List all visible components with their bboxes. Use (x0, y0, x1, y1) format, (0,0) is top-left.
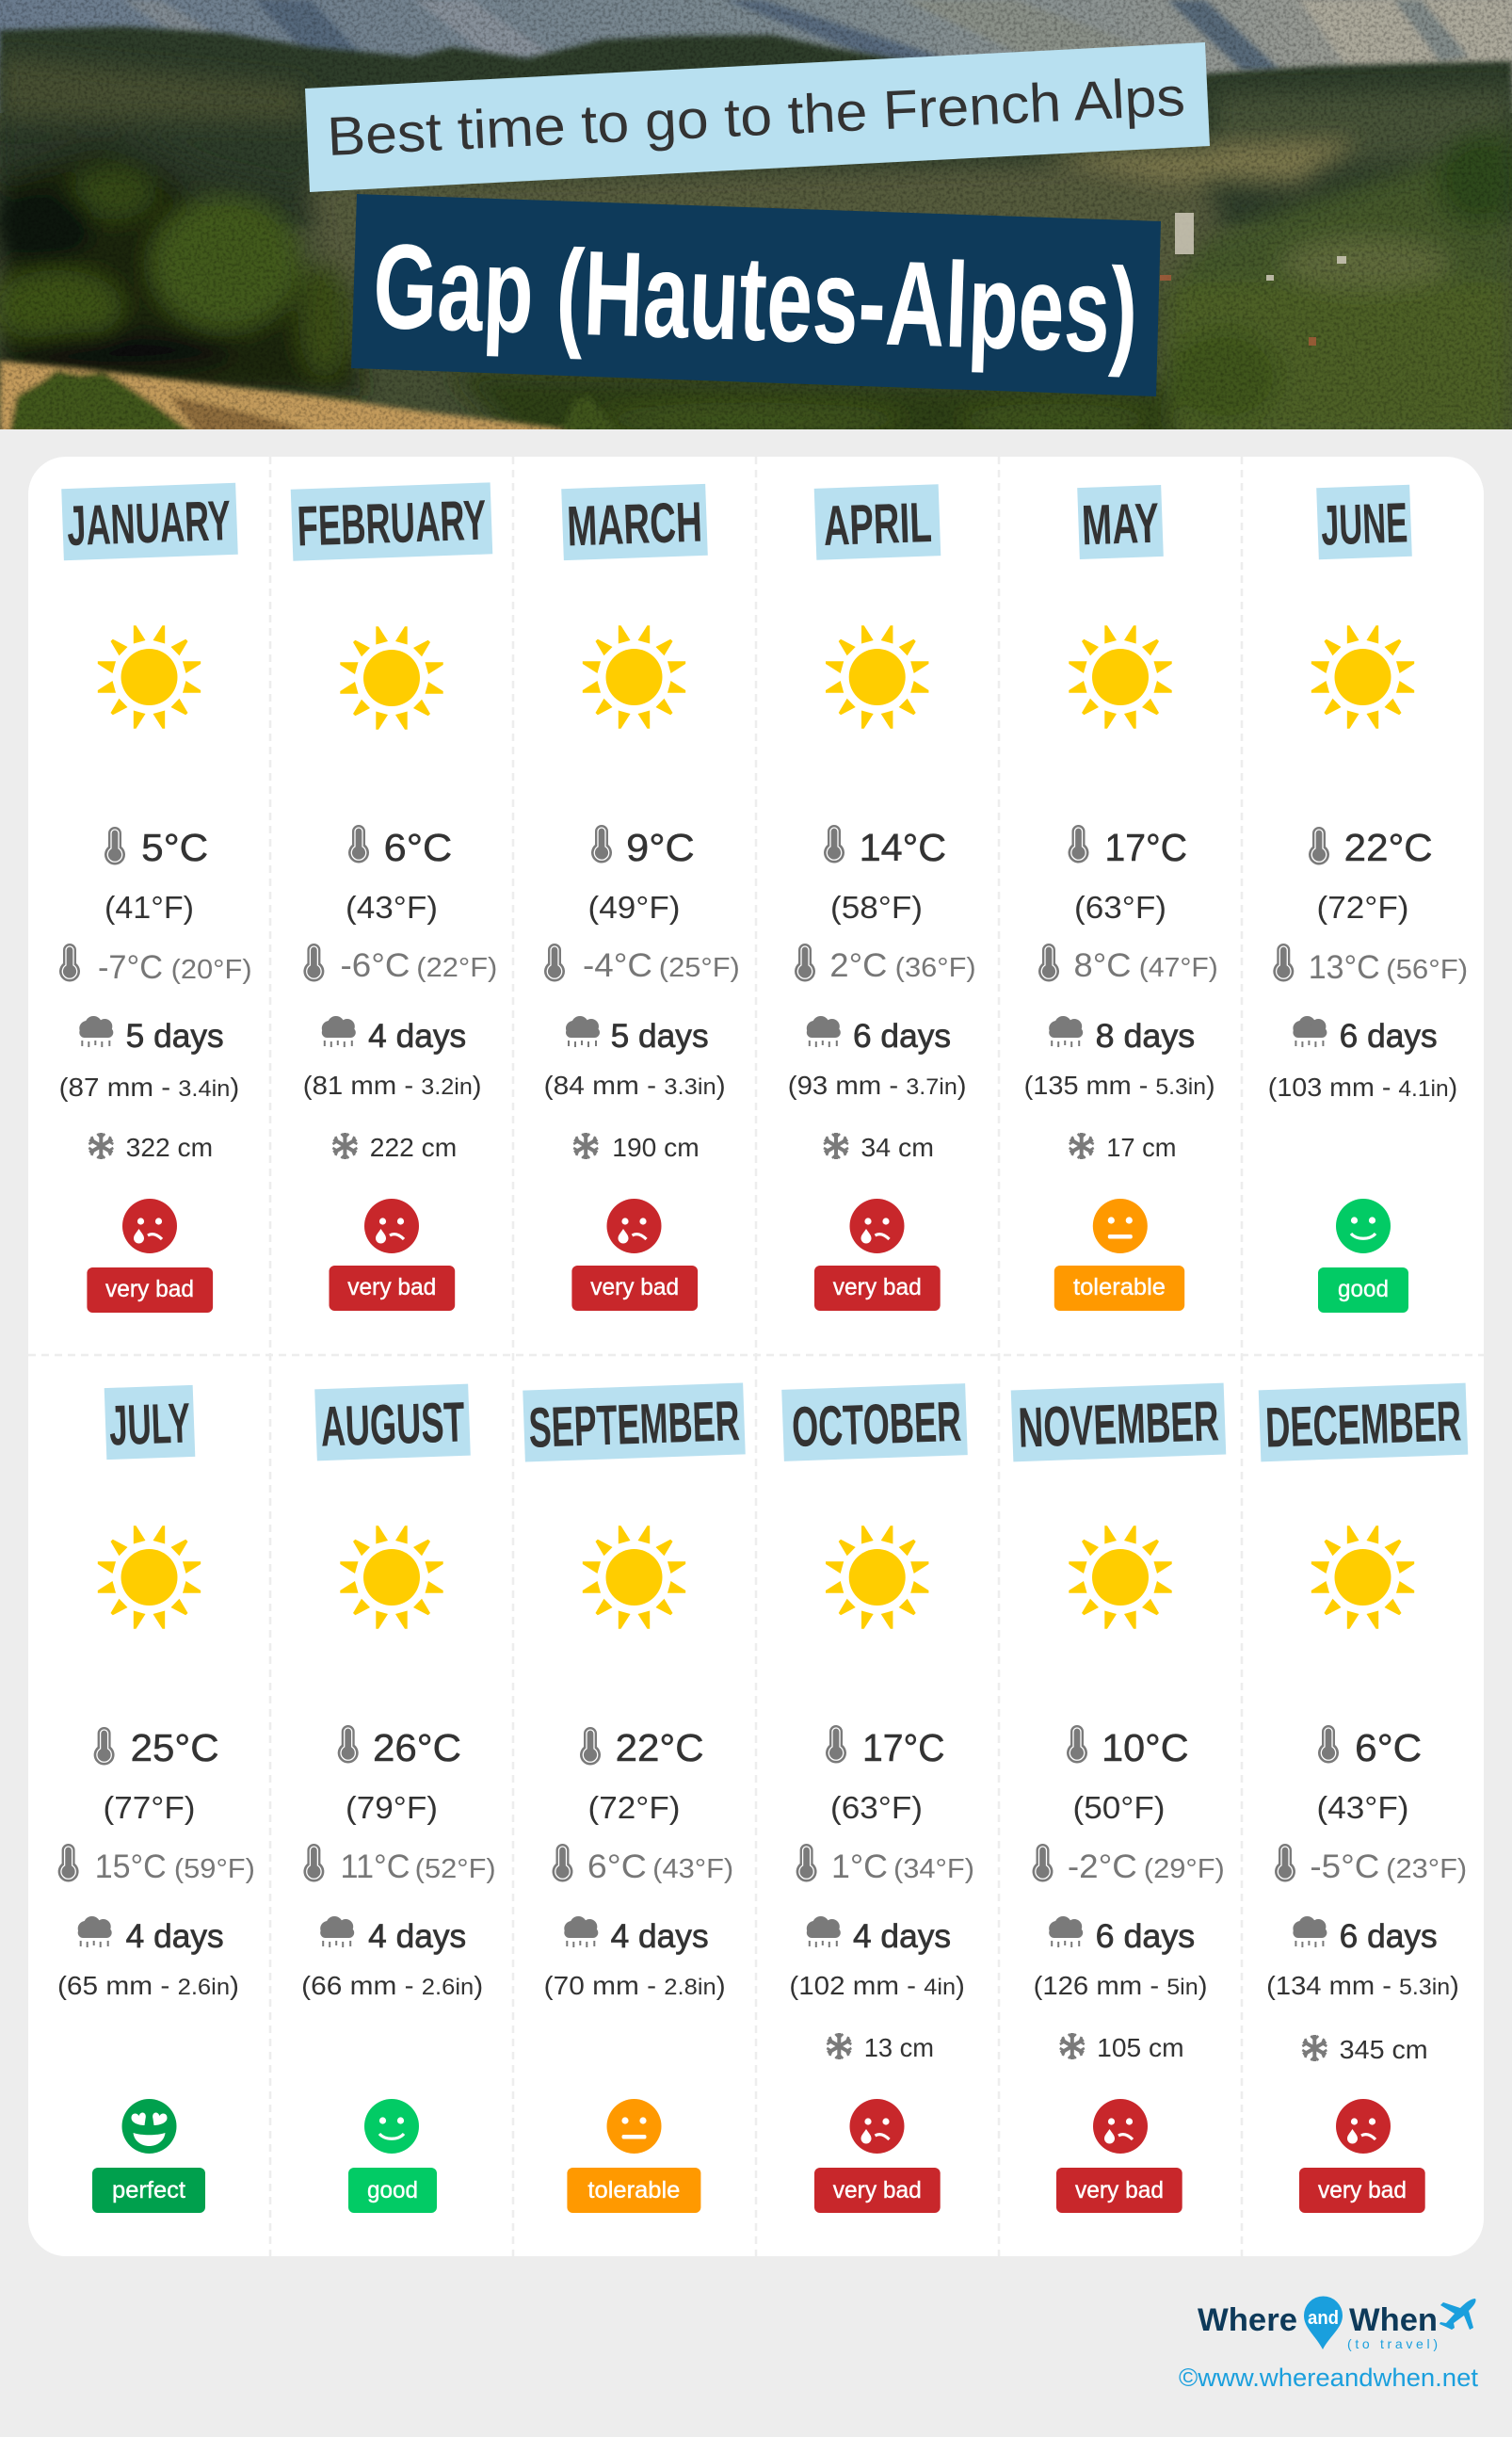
average low temperature: -7°C (98, 949, 163, 986)
average high temperature (1318, 1725, 1422, 1769)
icon: rating face (122, 1199, 177, 1253)
rating badge: very bad (1318, 2177, 1407, 2203)
snowfall (1060, 2033, 1184, 2062)
average low temperature: (47°F) (1139, 953, 1218, 983)
average high temperature: 17°C (862, 1726, 945, 1769)
icon: sun (826, 1525, 928, 1629)
high temperature Fahrenheit: (63°F) (1074, 890, 1166, 925)
rainy days (807, 1916, 951, 1955)
average high temperature: 25°C (131, 1726, 219, 1769)
logo: Where and When: and (1308, 2308, 1339, 2329)
month heading (561, 484, 708, 560)
average low temperature: (34°F) (893, 1854, 974, 1884)
icon: sun (1311, 1525, 1414, 1629)
rainy days: 6 days (1340, 1018, 1438, 1055)
average high temperature: 14°C (860, 826, 946, 869)
rating badge: good (1338, 1276, 1389, 1302)
rainy days: 5 days (126, 1018, 224, 1055)
title banner: Gap (Hautes-Alpes) (371, 219, 1140, 379)
average low temperature (59, 944, 252, 986)
rainy days: 4 days (611, 1918, 709, 1955)
panel: April (788, 484, 976, 1311)
average high temperature: 6°C (1355, 1726, 1422, 1769)
average high temperature: 22°C (1344, 826, 1433, 869)
rating badge (1318, 1267, 1408, 1313)
high temperature Fahrenheit: (63°F) (830, 1790, 923, 1825)
rainy days (79, 1016, 224, 1055)
average high temperature: 9°C (626, 826, 695, 869)
snowfall: 34 cm (861, 1133, 934, 1162)
average low temperature: 1°C (831, 1848, 888, 1885)
panel: October (781, 1383, 974, 2213)
icon: sun (583, 625, 685, 729)
month heading (814, 484, 941, 560)
rainy days: 4 days (368, 1018, 466, 1055)
average low temperature: (43°F) (652, 1854, 733, 1884)
rainy days: 4 days (368, 1918, 466, 1955)
panel: June (1268, 485, 1468, 1313)
average low temperature: (23°F) (1386, 1854, 1467, 1884)
average high temperature (338, 1725, 461, 1769)
rainfall amount: (126 mm - 5in) (1034, 1971, 1207, 2000)
icon: map pin (1304, 2296, 1343, 2349)
month heading: JUNE (1320, 491, 1408, 557)
average low temperature: (20°F) (171, 955, 252, 985)
average low temperature: -4°C (583, 947, 652, 984)
rating badge (1056, 2168, 1182, 2213)
rainy days (320, 1916, 466, 1955)
month heading (781, 1383, 968, 1461)
rainfall amount: (134 mm - 5.3in) (1266, 1971, 1459, 2000)
rating badge: tolerable (1073, 1274, 1166, 1300)
average low temperature: 13°C (1309, 949, 1380, 986)
month heading: MARCH (566, 491, 703, 557)
month heading (291, 482, 492, 561)
rainy days: 6 days (853, 1018, 951, 1055)
average high temperature: 5°C (141, 826, 208, 869)
rainfall amount: (135 mm - 5.3in) (1024, 1071, 1215, 1100)
snowfall: 17 cm (1106, 1133, 1177, 1162)
high temperature Fahrenheit: (72°F) (1316, 890, 1408, 925)
month heading (1077, 485, 1164, 559)
average low temperature: (25°F) (659, 953, 740, 983)
panel: May (1024, 485, 1218, 1311)
title banner (351, 194, 1161, 396)
average low temperature (303, 1844, 496, 1885)
month heading (1011, 1383, 1226, 1461)
rating badge (1054, 1266, 1184, 1311)
snowfall: 190 cm (612, 1133, 700, 1162)
high temperature Fahrenheit: (72°F) (587, 1790, 680, 1825)
icon: rating face (364, 2099, 419, 2154)
icon: rating face (849, 1199, 904, 1253)
icon: sun (98, 1525, 201, 1629)
high temperature Fahrenheit: (43°F) (346, 890, 438, 925)
month heading: OCTOBER (791, 1390, 962, 1459)
average high temperature: 17°C (1105, 826, 1187, 869)
rating badge: very bad (1075, 2177, 1164, 2203)
panel: August (301, 1384, 496, 2213)
rainy days (1049, 1016, 1195, 1055)
rainy days (1293, 1916, 1438, 1955)
rainfall amount: (93 mm - 3.7in) (788, 1071, 967, 1100)
average high temperature (1067, 1725, 1189, 1769)
rainy days (564, 1916, 709, 1955)
icon: airplane (1440, 2299, 1476, 2330)
rainy days (1049, 1916, 1195, 1955)
snowfall (1070, 1133, 1177, 1162)
snowfall: 105 cm (1097, 2033, 1184, 2062)
average low temperature: 8°C (1073, 947, 1132, 984)
average high temperature (826, 1725, 945, 1769)
logo: Where and When: Where (1198, 2302, 1297, 2338)
average high temperature (824, 825, 946, 869)
rainfall amount: (65 mm - 2.6in) (57, 1971, 239, 2000)
rating badge (567, 2168, 700, 2213)
rainy days (1293, 1016, 1438, 1055)
month heading: APRIL (822, 491, 933, 557)
average low temperature (1273, 944, 1468, 986)
month heading: FEBRUARY (296, 489, 488, 558)
panel: March (544, 484, 740, 1311)
panel: September (523, 1382, 746, 2213)
rainy days: 5 days (611, 1018, 709, 1055)
average low temperature: (29°F) (1144, 1854, 1225, 1884)
rating badge: perfect (112, 2177, 185, 2203)
month heading: JULY (108, 1392, 191, 1457)
high temperature Fahrenheit: (49°F) (587, 890, 680, 925)
average low temperature: 2°C (829, 947, 887, 984)
rating badge: very bad (833, 2177, 922, 2203)
panel: November (1011, 1383, 1226, 2213)
logo: Where and When: When (1349, 2302, 1438, 2338)
rainy days (807, 1016, 951, 1055)
rainy days: 6 days (1340, 1918, 1438, 1955)
average low temperature (58, 1844, 255, 1885)
icon: sun (583, 1525, 685, 1629)
average low temperature: (22°F) (416, 953, 497, 983)
month heading: JANUARY (66, 489, 232, 557)
icon: rating face (606, 2099, 661, 2154)
rainy days: 6 days (1096, 1918, 1195, 1955)
icon: rating face (606, 1199, 661, 1253)
snowfall (1302, 2035, 1428, 2064)
snowfall (824, 1133, 934, 1162)
average low temperature: 15°C (95, 1848, 167, 1885)
website credit: ©www.whereandwhen.net (1179, 2364, 1478, 2392)
rainy days: 4 days (853, 1918, 951, 1955)
icon: rating face (364, 1199, 419, 1253)
average high temperature: 10°C (1102, 1726, 1189, 1769)
high temperature Fahrenheit: (77°F) (104, 1790, 196, 1825)
rainy days: 4 days (126, 1918, 224, 1955)
icon: rating face (1336, 1199, 1391, 1253)
average low temperature (544, 944, 740, 984)
rating badge (330, 1266, 455, 1311)
rainfall amount: (70 mm - 2.8in) (544, 1971, 726, 2000)
high temperature Fahrenheit: (79°F) (346, 1790, 438, 1825)
panel: monthly calendar card (28, 457, 1484, 2256)
rainfall amount: (87 mm - 3.4in) (59, 1073, 239, 1102)
subtitle banner (305, 42, 1210, 192)
average high temperature (94, 1726, 219, 1769)
average high temperature: 26°C (373, 1726, 461, 1769)
average high temperature: 22°C (616, 1726, 704, 1769)
month heading (1316, 485, 1412, 559)
logo: Where and When (1198, 2296, 1476, 2351)
rating badge (92, 2168, 205, 2213)
icon: sun (826, 625, 928, 729)
average high temperature (105, 826, 208, 869)
month heading: NOVEMBER (1017, 1389, 1220, 1460)
average high temperature (1309, 826, 1433, 869)
rating badge: very bad (105, 1276, 194, 1302)
icon: rating face (849, 2099, 904, 2154)
rainy days (78, 1916, 224, 1955)
high temperature Fahrenheit: (50°F) (1073, 1790, 1166, 1825)
icon: sun (1069, 625, 1172, 729)
average high temperature: 6°C (384, 826, 452, 869)
rainfall amount: (66 mm - 2.6in) (301, 1971, 483, 2000)
average high temperature (591, 825, 695, 869)
rainfall amount: (103 mm - 4.1in) (1268, 1073, 1457, 1102)
average low temperature: (52°F) (415, 1854, 496, 1884)
icon: sun (1311, 625, 1414, 729)
panel: February (291, 482, 497, 1311)
icon: rating face (1093, 2099, 1148, 2154)
average low temperature: (36°F) (895, 953, 976, 983)
hero photo: alpine valley (0, 0, 1512, 452)
snowfall (573, 1133, 700, 1162)
icon: sun (340, 1525, 443, 1629)
rating badge: very bad (833, 1274, 922, 1300)
rating badge (814, 2168, 941, 2213)
rainfall amount: (84 mm - 3.3in) (544, 1071, 726, 1100)
average low temperature: -5°C (1310, 1848, 1379, 1885)
rainfall amount: (102 mm - 4in) (789, 1971, 965, 2000)
rating badge (1299, 2168, 1425, 2213)
snowfall: 345 cm (1340, 2035, 1428, 2064)
snowfall: 322 cm (126, 1133, 213, 1162)
icon: sun (340, 626, 443, 730)
average low temperature: 11°C (341, 1848, 410, 1885)
average high temperature (580, 1726, 704, 1769)
icon: rating face (1093, 1199, 1148, 1253)
rating badge: good (367, 2177, 418, 2203)
month heading (105, 1385, 195, 1460)
rating badge: tolerable (587, 2177, 680, 2203)
average low temperature: 6°C (587, 1848, 647, 1885)
icon: rating face (122, 2099, 177, 2154)
panel: January (59, 483, 252, 1313)
rainfall amount: (81 mm - 3.2in) (303, 1071, 482, 1100)
snowfall (88, 1133, 213, 1162)
average high temperature (1068, 825, 1187, 869)
average low temperature (1032, 1844, 1225, 1885)
average low temperature: (56°F) (1386, 955, 1468, 985)
snowfall (827, 2033, 934, 2062)
snowfall: 13 cm (864, 2033, 934, 2062)
average low temperature: -2°C (1068, 1848, 1137, 1885)
average low temperature (1038, 944, 1218, 984)
rating badge (814, 1266, 941, 1311)
average low temperature (1275, 1844, 1467, 1885)
rating badge: very bad (590, 1274, 679, 1300)
month heading: MAY (1081, 492, 1160, 557)
panel: December (1259, 1383, 1468, 2213)
month heading (61, 483, 238, 560)
rainy days (322, 1016, 466, 1055)
logo: Where and When: (to travel) (1347, 2336, 1438, 2351)
snowfall: 222 cm (370, 1133, 457, 1162)
rainy days (566, 1016, 709, 1055)
month heading (523, 1382, 746, 1462)
rating badge (348, 2168, 437, 2213)
average low temperature (303, 944, 497, 984)
high temperature Fahrenheit: (41°F) (105, 890, 194, 925)
average low temperature (795, 944, 976, 984)
high temperature Fahrenheit: (43°F) (1316, 1790, 1408, 1825)
icon: rating face (1336, 2099, 1391, 2154)
month heading: AUGUST (319, 1390, 466, 1459)
rainy days: 8 days (1096, 1018, 1195, 1055)
average low temperature (796, 1844, 974, 1885)
rating badge: very bad (347, 1274, 436, 1300)
high temperature Fahrenheit: (58°F) (830, 890, 923, 925)
panel: July (57, 1385, 255, 2213)
icon: sun (1069, 1525, 1172, 1629)
rating badge (87, 1267, 213, 1313)
subtitle banner: Best time to go to the French Alps (326, 66, 1186, 168)
average high temperature (348, 825, 452, 869)
month heading: SEPTEMBER (527, 1389, 741, 1460)
icon: sun (98, 625, 201, 729)
month heading (314, 1384, 471, 1461)
average low temperature: (59°F) (174, 1854, 255, 1884)
average low temperature (552, 1844, 733, 1885)
average low temperature: -6°C (341, 947, 410, 984)
rating badge (571, 1266, 698, 1311)
snowfall (332, 1133, 457, 1162)
